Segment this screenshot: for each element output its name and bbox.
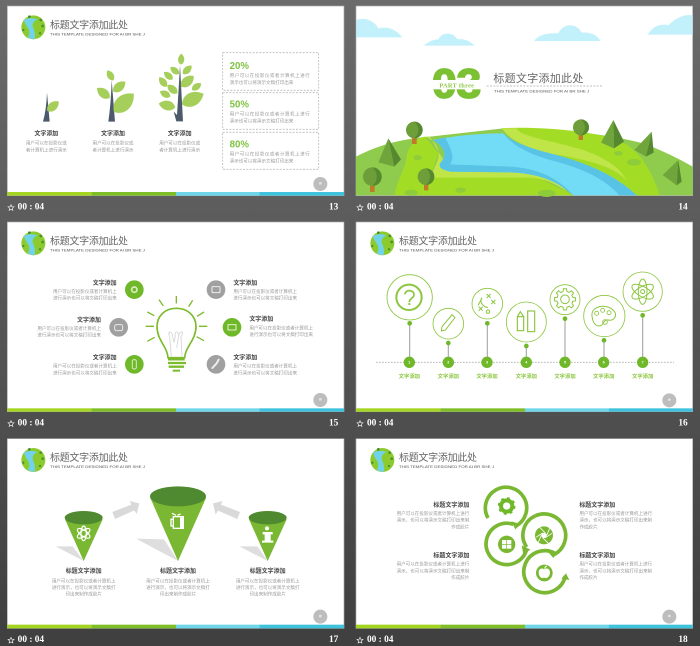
- footer: [8, 202, 339, 212]
- callout: 20%: 20%: [230, 61, 249, 72]
- cone captions: 进行演示，也可以将演示文稿打: [236, 584, 300, 591]
- linked ring arrows: [485, 487, 566, 593]
- color bar: [7, 192, 344, 196]
- icon: light bulb: [146, 296, 207, 371]
- items: right column: [207, 279, 313, 376]
- section number 03: 03: [432, 61, 481, 107]
- footer: [357, 419, 688, 429]
- footer: 00 : 04: [367, 202, 394, 212]
- text: right column: 标题文字添加: [579, 552, 615, 560]
- callout: 80%: [223, 132, 319, 169]
- page button: [313, 610, 327, 624]
- footer: 15: [329, 419, 339, 429]
- footer: 00 : 04: [367, 419, 394, 429]
- text: right column: [579, 501, 653, 581]
- numbered nodes: 7: [642, 361, 644, 365]
- footer: 00 : 04: [18, 202, 44, 212]
- slide header: THIS TEMPLATE DESIGNED FOR AI BR SHE J: [50, 248, 145, 252]
- slide header: THIS TEMPLATE DESIGNED FOR AI BR SHE J: [50, 465, 145, 469]
- text: left column: 用户可以在投影仪或者计算机上进行: [397, 561, 470, 568]
- footer: 17: [329, 635, 339, 645]
- text: right column: 作成胶片: [579, 523, 598, 530]
- ring arrowheads: [511, 521, 569, 580]
- cone: left: [65, 511, 103, 561]
- cone captions: 标题文字添加: [160, 567, 196, 575]
- cone shadows: [56, 539, 268, 561]
- text: tree captions: 用户可以在投影仪或: [26, 140, 67, 147]
- color bar: [356, 408, 693, 412]
- text: left column: 标题文字添加: [433, 552, 469, 560]
- icon: small sapling: [43, 93, 62, 122]
- callout: 80%: 演示也可以将演示文稿打印出来: [230, 158, 294, 165]
- footer: [8, 419, 339, 429]
- slide header: 标题文字添加此处: [50, 451, 128, 464]
- text: left column: 作成胶片: [451, 523, 470, 530]
- cone captions: 进行演示，也可以将演示文稿打: [52, 584, 116, 591]
- text: left column: [397, 501, 470, 581]
- items: left column: 进行演示也可以将文稿打印出来: [37, 332, 101, 339]
- text: left column: 演示，也可以将演示文稿打印出来制: [397, 567, 470, 574]
- cone captions: 标题文字添加: [66, 567, 102, 575]
- footer: [357, 202, 688, 212]
- panel: slide 17 cones: [7, 439, 344, 645]
- color bar: [7, 408, 344, 412]
- footer: 13: [329, 202, 339, 212]
- icon: medium tree: [94, 69, 139, 122]
- color bar: [7, 625, 344, 628]
- text: tree captions: 用户可以在投影仪或: [159, 140, 201, 147]
- panel: slide 13 growing trees: [7, 6, 344, 212]
- text: right column: 用户可以在投影仪或者计算机上进行: [579, 561, 653, 568]
- text: left column: 作成胶片: [451, 574, 470, 581]
- callout: 80%: 80%: [230, 140, 249, 151]
- slide header: 标题文字添加此处: [399, 234, 477, 247]
- page button: [662, 610, 676, 624]
- callout: 20%: 用户可以在投影仪或者计算机上进行: [230, 72, 310, 79]
- slide header: THIS TEMPLATE DESIGNED FOR AI BR SHE J: [399, 465, 494, 469]
- panel: slide 16 timeline: [356, 222, 693, 429]
- items: left column: 文字添加: [77, 316, 101, 324]
- icon: windows disc: [498, 536, 515, 553]
- callout: 20%: [223, 53, 319, 90]
- text: tree captions: 文字添加: [34, 129, 58, 137]
- trees and pyramids: [363, 119, 682, 192]
- text: tree captions: 者计算机上进行演示: [93, 147, 134, 154]
- slide header: 标题文字添加此处: [50, 18, 128, 31]
- text: right column: 作成胶片: [579, 574, 598, 581]
- items: right column: 用户可以在投影仪或者计算机上: [233, 363, 297, 370]
- slide header: [370, 231, 494, 255]
- items: left column: 用户可以在投影仪或者计算机上: [53, 288, 117, 295]
- timeline labels: 文字添加: [438, 372, 459, 380]
- timeline labels: [399, 372, 653, 380]
- landscape: hills and river: [356, 128, 693, 197]
- cone: right: [249, 511, 287, 561]
- text: tree captions: 者计算机上进行演示: [26, 147, 67, 154]
- footer: 00 : 04: [18, 635, 44, 645]
- timeline labels: 文字添加: [516, 372, 537, 380]
- items: left column: 文字添加: [93, 279, 117, 287]
- footer: 00 : 04: [367, 635, 394, 645]
- text: left column: 演示，也可以将演示文稿打印出来制: [397, 517, 470, 524]
- slide header: [370, 448, 494, 472]
- callout: 50%: 用户可以在投影仪或者计算机上进行: [230, 110, 310, 117]
- items: right column: 进行演示也可以将文稿打印出来: [233, 369, 297, 376]
- cone captions: 用户可以在投影仪或者计算机上: [236, 577, 300, 584]
- footer: 16: [678, 419, 688, 429]
- timeline labels: 文字添加: [476, 372, 498, 380]
- text: tree captions: 者计算机上进行演示: [159, 147, 201, 154]
- cone captions: 用户可以在投影仪或者计算机上: [52, 577, 116, 584]
- numbered nodes: 6: [603, 361, 605, 365]
- color bar: [356, 625, 693, 628]
- numbered nodes: 5: [564, 361, 566, 365]
- footer: 18: [678, 635, 688, 645]
- slide header: 标题文字添加此处: [399, 451, 477, 464]
- items: right column: 文字添加: [233, 279, 257, 287]
- icon: gear: [499, 499, 514, 513]
- cone captions: 印出来制作成胶片: [249, 591, 286, 598]
- numbered nodes: 3: [486, 361, 488, 365]
- icon circles: [387, 272, 662, 342]
- cone: center: [150, 486, 206, 561]
- timeline labels: 文字添加: [399, 372, 420, 380]
- panel: slide 15 light bulb: [7, 222, 344, 429]
- text: tree captions: 用户可以在投影仪或: [93, 140, 134, 147]
- footer: 00 : 04: [18, 419, 44, 429]
- callout: 50%: [223, 93, 319, 129]
- slide header: 标题文字添加此处: [50, 234, 128, 247]
- items: left column: 进行演示也可以将文稿打印出来: [53, 295, 117, 302]
- numbered nodes: 2: [447, 361, 449, 365]
- timeline labels: 文字添加: [632, 372, 653, 380]
- section title: 标题文字添加此处: [493, 71, 583, 85]
- page button: [313, 393, 327, 407]
- icon: apple disc: [536, 565, 553, 581]
- cone captions: [52, 567, 300, 598]
- connector dots: [407, 313, 645, 348]
- items: left column: [37, 279, 144, 376]
- items: left column: 用户可以在投影仪或者计算机上: [53, 363, 117, 370]
- text: tree captions: [26, 129, 201, 154]
- items: right column: 进行演示也可以将文稿打印出来: [233, 295, 297, 302]
- panel: slide 14 section landscape: [356, 6, 693, 212]
- footer: [357, 635, 688, 645]
- icon: large tree: [157, 54, 207, 121]
- items: right column: 文字添加: [249, 315, 273, 323]
- section number 03: PART three: [439, 83, 474, 90]
- text: right column: 标题文字添加: [579, 501, 615, 509]
- items: left column: 用户可以在投影仪或者计算机上: [37, 325, 101, 332]
- callout: 80%: 用户可以在投影仪或者计算机上进行: [230, 151, 310, 158]
- text: tree captions: 文字添加: [101, 129, 125, 137]
- section title: [487, 71, 603, 93]
- text: left column: 用户可以在投影仪或者计算机上进行: [397, 510, 470, 517]
- icon: aperture disc: [535, 526, 553, 544]
- arrows: [112, 501, 240, 519]
- text: right column: 用户可以在投影仪或者计算机上进行: [579, 510, 653, 517]
- page button: [313, 177, 327, 191]
- text: right column: 演示，也可以将演示文稿打印出来制: [579, 517, 653, 524]
- items: right column: 用户可以在投影仪或者计算机上: [233, 288, 297, 295]
- slide header: THIS TEMPLATE DESIGNED FOR AI BR SHE J: [399, 248, 494, 252]
- footer: 14: [678, 202, 688, 212]
- section title: THIS TEMPLATE DESIGNED FOR AI BR SHE J: [494, 89, 590, 93]
- items: left column: 进行演示也可以将文稿打印出来: [53, 369, 117, 376]
- cone captions: 标题文字添加: [250, 567, 286, 575]
- timeline labels: 文字添加: [554, 372, 576, 380]
- items: right column: 用户可以在投影仪或者计算机上: [249, 324, 313, 331]
- slide header: [21, 15, 145, 39]
- numbered nodes: [404, 357, 648, 368]
- timeline labels: 文字添加: [593, 372, 614, 380]
- items: left column: 文字添加: [93, 353, 117, 361]
- cone captions: 进行演示，也可以将演示文稿打: [146, 584, 210, 591]
- numbered nodes: 4: [525, 361, 528, 365]
- text: left column: 标题文字添加: [433, 501, 469, 509]
- slide header: [21, 231, 145, 255]
- callout: 50%: 50%: [230, 99, 249, 110]
- clouds: [356, 15, 693, 46]
- callout: 50%: 演示也可以将演示文稿打印出来: [230, 117, 294, 124]
- slide header: [21, 448, 145, 472]
- footer: [8, 635, 339, 645]
- items: right column: 文字添加: [233, 353, 257, 361]
- panel: slide 18 circular arrows: [356, 439, 693, 645]
- timeline axis and stems: [376, 315, 674, 362]
- slide header: THIS TEMPLATE DESIGNED FOR AI BR SHE J: [50, 32, 145, 36]
- text: right column: 演示，也可以将演示文稿打印出来制: [579, 567, 653, 574]
- items: right column: 进行演示也可以将文稿打印出来: [249, 331, 313, 338]
- page button: [662, 393, 676, 407]
- callout: 20%: 演示也可以将演示文稿打印出来: [230, 79, 294, 86]
- text: tree captions: 文字添加: [168, 129, 192, 137]
- cone captions: 印出来制作成胶片: [160, 591, 197, 598]
- cone captions: 印出来制作成胶片: [65, 591, 102, 598]
- cone captions: 用户可以在投影仪或者计算机上: [146, 577, 210, 584]
- numbered nodes: 1: [408, 361, 410, 365]
